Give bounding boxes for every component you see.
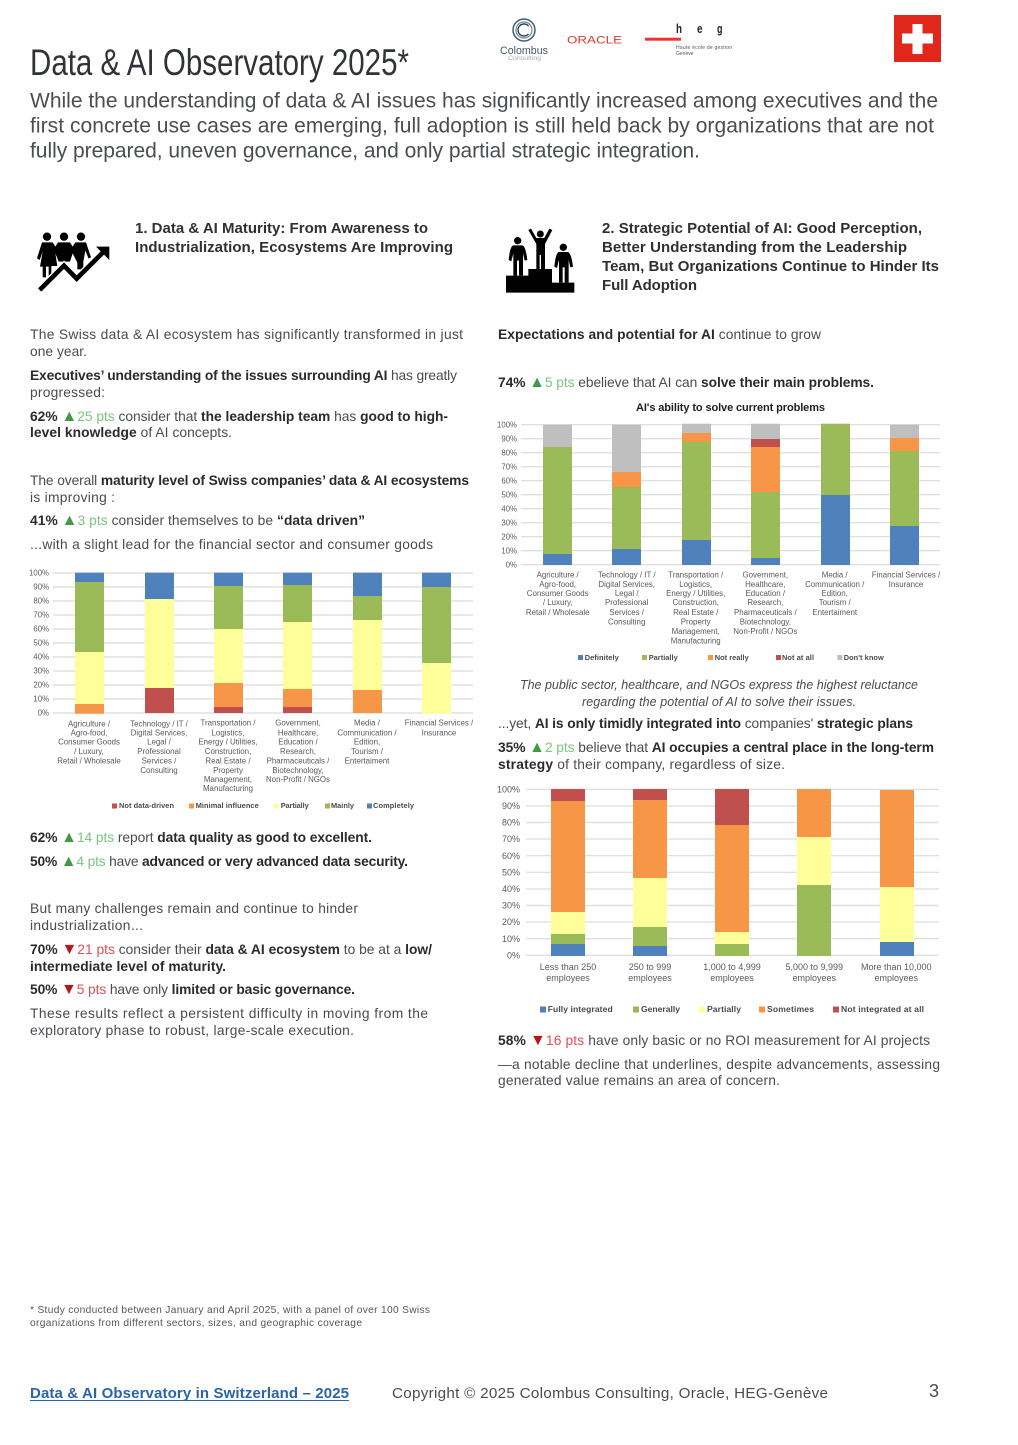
stat: 70 percent low maturity: 70% ▼21 pts consider their data & AI ecosystem to be at a low/ xyxy=(30,941,432,958)
chart: AI ability to solve current problems: 10% xyxy=(501,546,517,555)
chart legend: data-driven: Mainly xyxy=(331,801,355,810)
chart: AI ability to solve current problems: Tourism / xyxy=(819,598,852,607)
logo: Oracle: ORACLE xyxy=(567,34,622,46)
text: notable decline xyxy=(498,1057,940,1088)
chart legend: integration: Not integrated at all xyxy=(841,1004,924,1014)
chart: data-driven by sector: 80% xyxy=(33,596,49,606)
text: challenges remain xyxy=(30,901,358,933)
text: overall maturity xyxy=(30,473,469,505)
chart: data-driven by sector: Legal / xyxy=(147,738,172,746)
chart: data-driven by sector: Digital Services, xyxy=(131,728,187,738)
chart: AI ability to solve current problems: Services / xyxy=(609,608,645,617)
chart legend: integration: Partially xyxy=(707,1004,741,1014)
chart: AI ability to solve current problems: Communication / xyxy=(805,580,865,589)
chart legend: data-driven: Completely xyxy=(373,801,415,810)
stat: 58 percent ROI measurement: 58% ▼16 pts have only basic or no ROI measurement for AI projects xyxy=(498,1032,930,1049)
chart: AI ability to solve current problems: 90% xyxy=(501,434,517,443)
chart: data-driven by sector: Consulting xyxy=(140,766,178,775)
text: italic chart note: regarding the potential of AI to solve their issues. xyxy=(582,695,856,709)
chart: data-driven by sector: Healthcare, xyxy=(278,728,318,738)
stat: 50 percent basic governance: 50% ▼5 pts have only limited or basic governance. xyxy=(30,981,355,998)
stat: 74 percent believe: 74% ▲5 pts ebelieve that AI can solve their main problems. xyxy=(498,374,874,391)
chart: AI ability to solve current problems: Non-Profit / NGOs xyxy=(733,627,797,636)
chart: AI ability to solve current problems: Healthcare, xyxy=(745,580,785,589)
intro text: first concrete use cases are emerging, full adoption is still held back by organizations that are not xyxy=(30,114,934,138)
chart: AI ability to solve current problems: Real Estate / xyxy=(673,608,719,617)
chart: data-driven by sector: 60% xyxy=(33,624,49,634)
chart: AI ability to solve current problems: / Luxury, xyxy=(543,598,573,607)
chart: AI integration by company size: 30% xyxy=(502,901,520,911)
stat: 62 percent leadership knowledge xyxy=(30,408,448,440)
footer link: Data & AI Observatory in Switzerland – 2025 xyxy=(30,1385,349,1402)
stat: 62 percent leadership knowledge: 62% ▲25 pts consider that the leadership team has good to high- xyxy=(30,408,448,425)
stat: 70 percent low maturity: intermediate level of maturity. xyxy=(30,959,226,974)
chart: AI integration by company size: More than 10,000 xyxy=(861,962,932,972)
logo: HEG Geneve: Haute école de gestion xyxy=(676,45,732,51)
chart: data-driven by sector: 10% xyxy=(33,694,49,704)
chart: AI integration by company size xyxy=(497,784,939,1014)
icon: people on podium xyxy=(506,229,574,293)
chart: AI ability to solve current problems: 100% xyxy=(497,420,517,429)
chart: AI ability to solve current problems: 40% xyxy=(501,504,517,513)
chart: AI ability to solve current problems: Entertaiment xyxy=(812,608,858,617)
text: challenges remain: But many challenges remain and continue to hinder xyxy=(30,901,358,916)
chart: AI integration by company size: 100% xyxy=(497,784,520,794)
chart: data-driven by sector xyxy=(29,568,474,810)
footer copyright: Copyright © 2025 Colombus Consulting, Oracle, HEG-Genève xyxy=(392,1385,828,1402)
chart: AI ability to solve current problems xyxy=(497,402,941,662)
chart: AI ability to solve current problems: Consulting xyxy=(608,617,645,626)
chart: data-driven by sector: 40% xyxy=(33,652,49,662)
chart: AI integration by company size: employees xyxy=(546,973,590,983)
logo: HEG Geneve: g xyxy=(717,21,723,36)
text: expectations: Expectations and potential for AI continue to grow xyxy=(498,327,821,342)
chart: data-driven by sector: 70% xyxy=(33,610,49,620)
chart legend: data-driven: Partially xyxy=(281,801,310,810)
chart: data-driven by sector: Agro-food, xyxy=(71,728,107,738)
text: italic chart note xyxy=(520,678,918,709)
chart: AI ability to solve current problems: 20% xyxy=(501,532,517,541)
chart: data-driven by sector: Energy / Utilities, xyxy=(198,738,258,746)
chart: AI ability to solve current problems: Transportation / xyxy=(668,570,724,579)
chart: AI integration by company size: 70% xyxy=(502,834,520,844)
chart: data-driven by sector: Biotechnology, xyxy=(272,766,324,775)
chart: AI integration by company size: employees xyxy=(710,973,754,983)
chart: data-driven by sector: Technology / IT / xyxy=(130,720,189,728)
chart: data-driven by sector: Government, xyxy=(275,718,321,728)
chart: data-driven by sector: 20% xyxy=(33,680,49,690)
chart legend: AI ability xyxy=(578,653,884,662)
logo: Colombus Consulting: Colombus xyxy=(500,45,548,57)
logo: HEG Geneve: h xyxy=(676,21,682,36)
text: persistent difficulty: These results reflect a persistent difficulty in moving from the xyxy=(30,1006,428,1021)
stat: 35 percent long-term strategy xyxy=(498,739,934,772)
chart: AI integration by company size: 0% xyxy=(507,950,520,960)
stat: 62 percent leadership knowledge: level knowledge of AI concepts. xyxy=(30,425,232,440)
chart: AI ability to solve current problems: Media / xyxy=(822,570,848,579)
chart: AI ability to solve current problems: 80% xyxy=(501,448,517,457)
chart: AI ability to solve current problems: 50% xyxy=(501,490,517,499)
chart: AI ability to solve current problems: Digital Services, xyxy=(598,580,655,589)
chart: AI integration by company size: 60% xyxy=(502,851,520,861)
stat: 50 percent data security: 50% ▲4 pts have advanced or very advanced data security. xyxy=(30,853,408,870)
chart: AI ability to solve current problems: Research, xyxy=(747,598,783,607)
chart: data-driven by sector: Manufacturing xyxy=(203,784,253,793)
chart: AI ability to solve current problems: 70% xyxy=(501,462,517,471)
text: italic chart note: The public sector, healthcare, and NGOs express the highest reluctance xyxy=(520,678,918,692)
stat: 35 percent long-term strategy: 35% ▲2 pts believe that AI occupies a central place in the long-term xyxy=(498,739,934,756)
footnote xyxy=(30,1305,430,1329)
chart legend: data-driven: Not data-driven xyxy=(119,801,174,810)
chart: AI ability to solve current problems: 60% xyxy=(501,476,517,485)
panel: data and AI maturity xyxy=(29,220,474,1038)
chart: data-driven by sector: Construction, xyxy=(205,747,251,756)
chart legend: AI ability: Don't know xyxy=(844,653,884,662)
chart: AI ability to solve current problems: Property xyxy=(681,617,711,626)
heading: section 2: Team, But Organizations Continue to Hinder Its xyxy=(602,258,939,275)
chart: AI integration by company size: employees xyxy=(793,973,837,983)
text: ecosystem transformation xyxy=(30,327,463,359)
chart: data-driven by sector: Financial Services / xyxy=(405,718,474,728)
chart: AI integration by company size: 20% xyxy=(502,917,520,927)
chart: AI ability to solve current problems: Biotechnology, xyxy=(740,617,791,626)
heading: section 2: 2. Strategic Potential of AI: Good Perception, xyxy=(602,220,922,237)
stat: 41 percent data driven: 41% ▲3 pts consider themselves to be “data driven” xyxy=(30,512,365,529)
chart: AI ability to solve current problems: Pharmaceuticals / xyxy=(734,608,797,617)
chart: data-driven by sector: Consumer Goods xyxy=(58,738,120,746)
chart legend: data-driven xyxy=(112,801,415,810)
heading: section 2 xyxy=(602,220,939,294)
logo: Colombus Consulting xyxy=(500,19,548,62)
chart: data-driven by sector: Tourism / xyxy=(351,747,384,756)
footnote: * Study conducted between January and April 2025, with a panel of over 100 Swiss xyxy=(30,1305,430,1316)
chart: data-driven by sector: Logistics, xyxy=(212,728,244,738)
chart: AI integration by company size: 5,000 to 9,999 xyxy=(786,962,843,972)
chart legend: integration xyxy=(540,1004,924,1014)
chart: AI integration by company size: employees xyxy=(875,973,919,983)
chart: data-driven by sector: Management, xyxy=(204,775,252,784)
chart: data-driven by sector: 90% xyxy=(33,582,49,592)
chart: data-driven by sector: 100% xyxy=(29,568,49,578)
chart legend: AI ability: Not at all xyxy=(782,653,814,662)
text: ecosystem transformation: one year. xyxy=(30,344,87,359)
chart: data-driven by sector: Services / xyxy=(142,756,177,766)
stat: 70 percent low maturity xyxy=(30,941,432,974)
text: executives understanding: Executives’ understanding of the issues surrounding AI has greatly xyxy=(30,368,457,383)
logo: HEG Geneve: e xyxy=(697,21,702,36)
heading: section 2: Better Understanding from the Leadership xyxy=(602,239,907,256)
heading: section 1: Industrialization, Ecosystems Are Improving xyxy=(135,239,453,256)
chart: data-driven by sector: Communication / xyxy=(337,728,397,738)
chart: AI ability to solve current problems: Manufacturing xyxy=(671,636,721,645)
heading: section 2: Full Adoption xyxy=(602,277,697,294)
chart: data-driven by sector: Retail / Wholesale xyxy=(57,756,121,766)
chart: data-driven by sector: Insurance xyxy=(422,728,457,738)
chart: AI ability to solve current problems: Edition, xyxy=(822,589,848,598)
chart: data-driven by sector: 50% xyxy=(33,638,49,648)
chart: AI integration by company size: 50% xyxy=(502,867,520,877)
chart: AI integration by company size: employees xyxy=(628,973,672,983)
page number: 3 xyxy=(929,1381,939,1401)
chart: AI ability to solve current problems: Technology / IT / xyxy=(598,570,656,579)
footnote: organizations from different sectors, sizes, and geographic coverage xyxy=(30,1318,362,1329)
icon: Swiss flag xyxy=(894,15,941,62)
text: challenges remain: industrialization... xyxy=(30,918,143,933)
intro text: While the understanding of data & AI issues has significantly increased among executives and the xyxy=(30,90,938,112)
chart: data-driven by sector: 0% xyxy=(38,708,49,718)
chart: AI ability to solve current problems: Government, xyxy=(742,570,788,579)
chart: AI ability to solve current problems: Insurance xyxy=(889,580,924,589)
chart legend: data-driven: Minimal influence xyxy=(196,801,259,810)
chart legend: integration: Sometimes xyxy=(767,1004,814,1014)
chart: AI ability to solve current problems: Professional xyxy=(605,598,649,607)
chart: data-driven by sector: Real Estate / xyxy=(205,756,251,766)
chart: data-driven by sector: Non-Profit / NGOs xyxy=(266,775,330,784)
chart: AI ability to solve current problems: 0% xyxy=(506,560,517,569)
chart: AI integration by company size: 40% xyxy=(502,884,520,894)
text: overall maturity: The overall maturity level of Swiss companies’ data & AI ecosystems xyxy=(30,473,469,488)
intro text xyxy=(30,90,938,162)
chart: data-driven by sector: Pharmaceuticals / xyxy=(267,756,330,766)
chart: data-driven by sector: 30% xyxy=(33,666,49,676)
logo: Colombus Consulting: Consulting xyxy=(508,55,541,62)
chart legend: AI ability: Not really xyxy=(715,653,750,662)
heading: section 1 xyxy=(135,220,453,256)
text: overall maturity: is improving : xyxy=(30,490,115,505)
chart: AI ability to solve current problems: Energy / Utilities, xyxy=(666,589,725,598)
intro text: fully prepared, uneven governance, and only partial strategic integration. xyxy=(30,140,700,162)
chart: AI integration by company size: 90% xyxy=(502,801,520,811)
chart title: AI's ability to solve current problems xyxy=(636,402,825,414)
chart: data-driven by sector: Entertaiment xyxy=(345,756,390,766)
chart: data-driven by sector: Transportation / xyxy=(201,718,256,728)
chart legend: AI ability: Partially xyxy=(649,653,679,662)
chart: AI ability to solve current problems: Financial Services / xyxy=(872,570,941,579)
chart: data-driven by sector: Education / xyxy=(278,738,319,746)
text: persistent difficulty: exploratory phase to robust, large-scale execution. xyxy=(30,1023,354,1038)
icon: people with rising arrow xyxy=(37,232,109,290)
chart: AI integration by company size: Less than 250 xyxy=(540,962,596,972)
chart legend: integration: Fully integrated xyxy=(548,1004,613,1014)
text: ecosystem transformation: The Swiss data & AI ecosystem has significantly transformed in just xyxy=(30,327,463,342)
text: executives understanding: progressed: xyxy=(30,385,105,400)
panel: strategic potential of AI xyxy=(497,220,941,1088)
text: executives understanding xyxy=(30,368,457,400)
chart: data-driven by sector: Edition, xyxy=(354,738,380,746)
text: notable decline: —a notable decline that underlines, despite advancements, assessing xyxy=(498,1057,940,1072)
text: financial sector lead: ...with a slight lead for the financial sector and consumer goods xyxy=(30,537,433,552)
chart: AI ability to solve current problems: Logistics, xyxy=(679,580,712,589)
chart: data-driven by sector: Agriculture / xyxy=(68,720,111,728)
chart: AI ability to solve current problems: Education / xyxy=(746,589,786,598)
chart: AI ability to solve current problems: Consumer Goods xyxy=(527,589,589,598)
chart: AI ability to solve current problems: Legal / xyxy=(615,589,639,598)
chart: AI integration by company size: 10% xyxy=(502,934,520,944)
chart: AI integration by company size: 250 to 999 xyxy=(629,962,671,972)
text: notable decline: generated value remains an area of concern. xyxy=(498,1073,780,1088)
chart: AI integration by company size: 80% xyxy=(502,818,520,828)
logo: HEG Geneve: Genève xyxy=(676,51,694,57)
chart: data-driven by sector: / Luxury, xyxy=(74,747,104,756)
stat: 62 percent data quality: 62% ▲14 pts report data quality as good to excellent. xyxy=(30,829,372,846)
stat: 35 percent long-term strategy: strategy of their company, regardless of size. xyxy=(498,757,785,772)
text: persistent difficulty xyxy=(30,1006,428,1038)
chart: AI ability to solve current problems: Agro-food, xyxy=(539,580,576,589)
chart: data-driven by sector: Research, xyxy=(280,747,316,756)
logo: HEG Geneve xyxy=(645,21,732,57)
chart: data-driven by sector: Media / xyxy=(354,718,381,728)
chart legend: AI ability: Definitely xyxy=(585,653,620,662)
chart: AI ability to solve current problems: Agriculture / xyxy=(537,570,580,579)
chart legend: integration: Generally xyxy=(641,1004,680,1014)
heading: section 1: 1. Data & AI Maturity: From Awareness to xyxy=(135,220,428,237)
chart: data-driven by sector: Professional xyxy=(137,747,181,756)
text: timid integration: ...yet, AI is only timidly integrated into companies' strategic plans xyxy=(498,716,913,731)
chart: AI ability to solve current problems: Management, xyxy=(672,627,720,636)
chart: AI ability to solve current problems: 30% xyxy=(501,518,517,527)
chart: data-driven by sector: Property xyxy=(213,766,243,775)
chart: AI ability to solve current problems: Construction, xyxy=(672,598,719,607)
title: Data & AI Observatory 2025* xyxy=(30,42,409,83)
chart: AI integration by company size: 1,000 to 4,999 xyxy=(703,962,761,972)
chart: AI ability to solve current problems: Retail / Wholesale xyxy=(526,608,590,617)
